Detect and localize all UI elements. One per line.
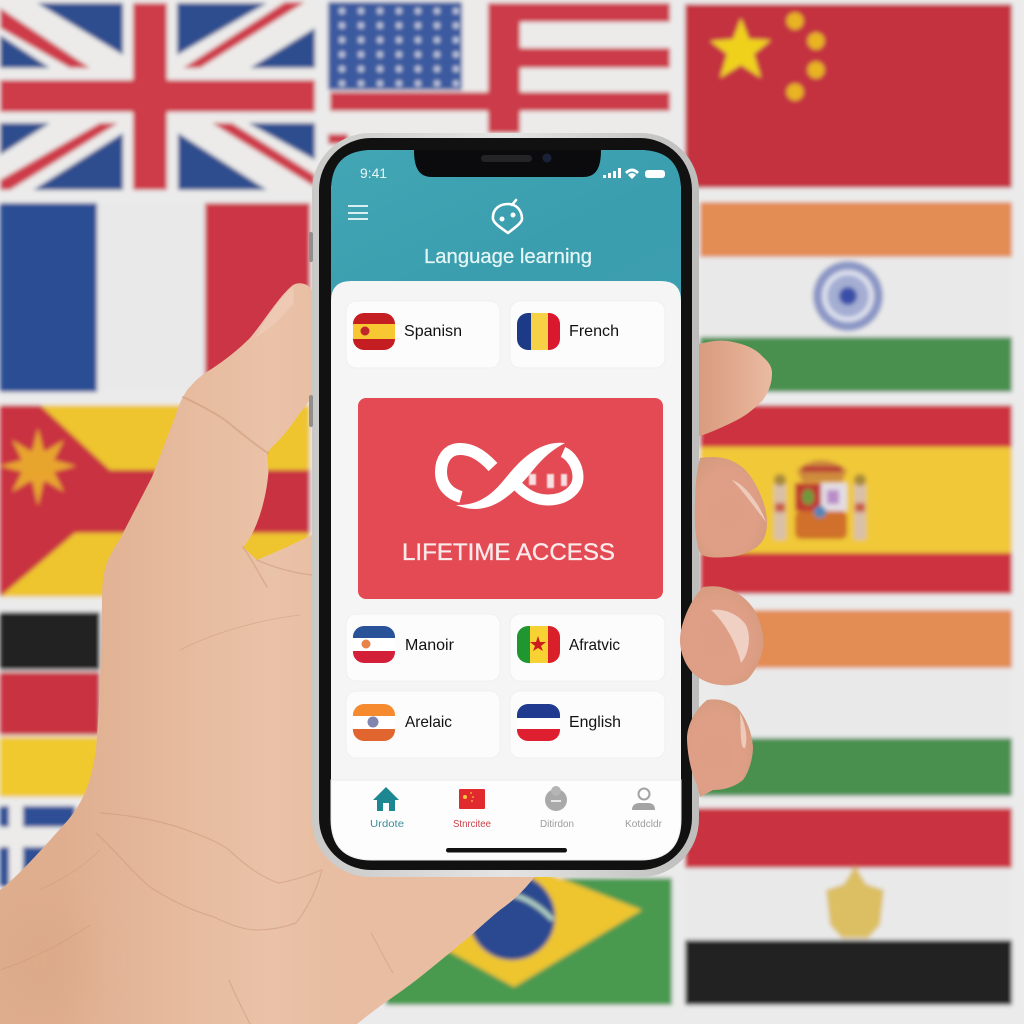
language tile: French: French [569,323,619,340]
palm, wrist and thumb [0,283,540,1024]
lifetime access card: LIFETIME ACCESS [402,539,615,566]
language tile: Arelaic: Arelaic [405,714,452,731]
app title: Language learning [424,246,592,268]
status bar time: 9:41 [360,165,387,181]
status bar icons [603,168,665,179]
flag: India upper [700,202,1012,392]
nav item: China flag [453,789,491,830]
content panel [331,281,681,780]
nav item: home [370,787,404,830]
nav item: home: Urdote [370,818,404,830]
finger: ring [680,586,763,685]
nail: little finger [740,713,746,748]
finger: index [695,341,772,437]
flag icon: tricolour [517,313,560,350]
app header [331,150,681,310]
flag icon: India [353,704,395,741]
flag icon: blue white red stripes [517,704,560,741]
language tile: Arelaic [353,704,452,741]
nav item: face icon [540,786,574,830]
fingertips wrapping over the phone edge [680,457,767,797]
flag: Brazil [386,860,672,1005]
bottom navigation bar [331,780,681,860]
language tile: French [517,313,618,350]
phone frame [312,133,699,877]
language tile: English [517,704,620,741]
nav item: China flag: Stnrcitee [453,818,491,830]
flag icon: green yellow red with star [517,626,560,663]
thumb nail [255,287,294,338]
flag: Nordic cross [0,805,75,890]
smartphone [309,133,699,877]
flag: China [685,4,1012,188]
flag: India lower [700,610,1012,796]
flag: Egypt [685,808,1012,1005]
app logo [493,200,522,233]
palm shading [0,397,393,1024]
hand holding the phone [0,283,772,1024]
nail: middle finger [732,480,766,522]
lifetime access card [358,398,663,599]
infinity icon [441,443,578,509]
language tile: English: English [569,714,621,731]
flag: Spain [700,405,1012,594]
home indicator [446,848,567,852]
language tile: Manoir: Manoir [405,637,455,654]
nav item: profile: Kotdcldr [625,818,662,830]
flag: United States [328,0,672,144]
flag icon: blue white red [353,626,395,663]
language tile: Spanish [353,313,461,350]
flag: United Kingdom [0,0,315,190]
flag: Germany [0,612,100,797]
flag icon: Spain [353,313,395,350]
screen [331,150,681,860]
nav item: profile [625,788,662,830]
language tile: Manoir [353,626,454,663]
Spanish coat of arms [774,460,866,540]
flag: France [0,203,310,392]
flag: red and yellow with sun emblem [0,405,310,597]
nav item: face icon: Ditirdon [540,818,574,830]
finger: little [687,699,753,797]
finger: middle [695,457,767,558]
nail: ring finger [711,610,749,663]
notch and camera [414,150,601,177]
hamburger menu icon [348,206,368,219]
language tile: Afratvic [517,626,620,663]
language tile: Afratvic: Afratvic [569,637,620,654]
language tile: Spanish: Spanisn [404,323,462,340]
